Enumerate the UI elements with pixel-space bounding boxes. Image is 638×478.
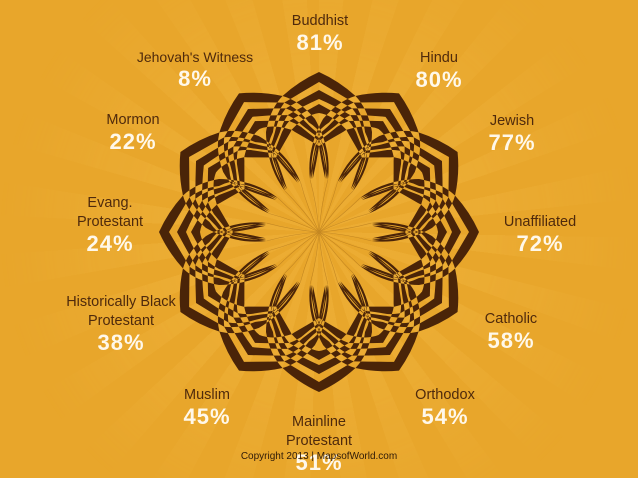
label: Hindu: Hindu [420, 50, 458, 66]
label: Buddhist: Buddhist [292, 13, 348, 29]
label: Mainline Protestant: Mainline [292, 414, 346, 430]
label: Evangelical Protestant: 24% [86, 231, 134, 256]
label: Historically Black Protestant: 38% [97, 330, 145, 355]
label: Unaffiliated: Unaffiliated [504, 214, 576, 230]
label: Muslim: Muslim [184, 387, 230, 403]
label: Buddhist: 81% [296, 30, 344, 55]
label: Evangelical Protestant: Evang. [87, 195, 133, 211]
label: Muslim [183, 387, 231, 429]
label: Jehovah's Witness [137, 49, 253, 91]
rosette: twelve interlaced petals [159, 72, 479, 392]
label: Historically Black Protestant: Historically Black [66, 294, 176, 310]
label: Mormon: Mormon [106, 112, 160, 128]
label: Orthodox [415, 387, 475, 429]
label: Hindu [415, 50, 463, 92]
label: Unaffiliated [504, 214, 576, 256]
background sunburst rays [154, 68, 481, 398]
label: Catholic [485, 311, 537, 353]
label: Catholic: Catholic [485, 311, 537, 327]
label: Historically Black Protestant [66, 294, 176, 355]
label: Mainline Protestant: 51% [295, 450, 343, 475]
label: Jehovah's Witness: 8% [178, 66, 212, 91]
copyright note: Copyright 2013 | MapsofWorld.com [241, 451, 397, 462]
label: Unaffiliated: 72% [516, 231, 564, 256]
label: Jewish [488, 113, 536, 155]
label: Jewish: 77% [488, 130, 536, 155]
label: Mormon [106, 112, 160, 154]
label: Orthodox: 54% [421, 404, 469, 429]
label: Mainline Protestant [286, 414, 352, 475]
label: Mainline Protestant: Protestant [286, 433, 352, 449]
label: Jewish: Jewish [490, 113, 534, 129]
label: Hindu: 80% [415, 67, 463, 92]
label: Orthodox: Orthodox [415, 387, 475, 403]
label: Muslim: 45% [183, 404, 231, 429]
label: Jehovah's Witness: Jehovah's Witness [137, 49, 253, 65]
label: Evangelical Protestant: Protestant [77, 214, 143, 230]
label: Mormon: 22% [109, 129, 157, 154]
label: Historically Black Protestant: Protestant [88, 313, 154, 329]
label: Catholic: 58% [487, 328, 535, 353]
label: Buddhist [292, 13, 348, 55]
label: Evangelical Protestant [77, 195, 143, 256]
